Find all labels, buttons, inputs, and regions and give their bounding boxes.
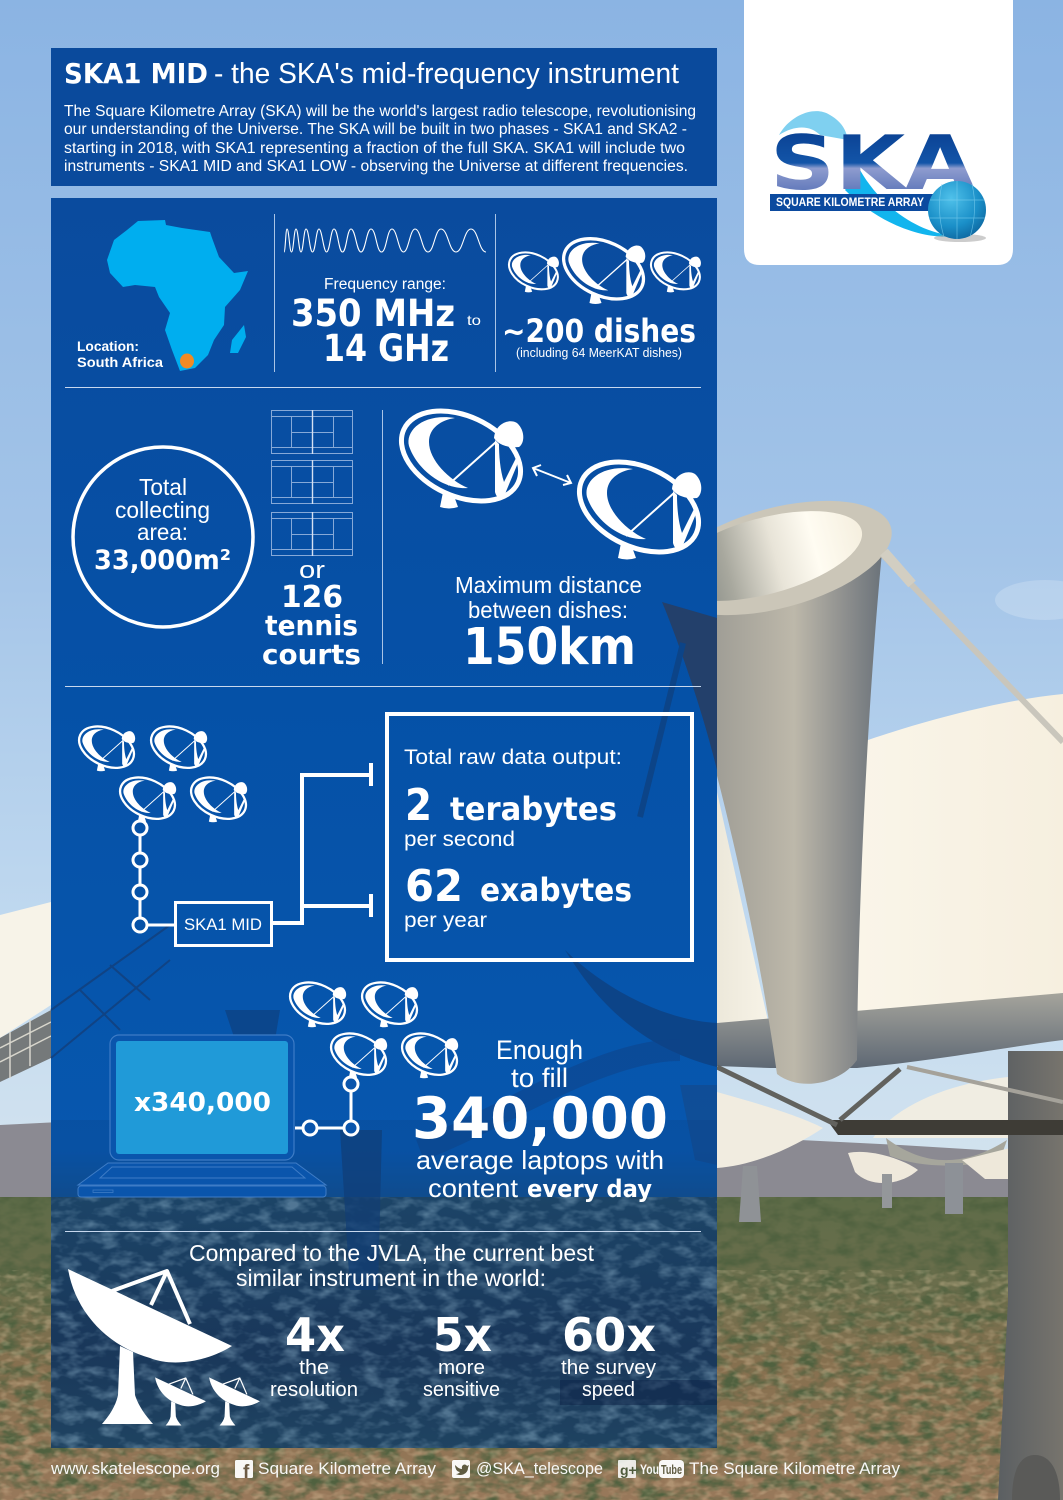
intro paragraph: instruments - SKA1 MID and SKA1 LOW - observing the Universe at different frequencies. (64, 158, 688, 175)
data output box: per year (404, 909, 487, 932)
tennis courts text: or (299, 557, 325, 584)
dish count: ~200 dishes (502, 312, 696, 350)
background photo: distant hills (0, 1122, 1063, 1200)
background photo: far dishes (717, 1077, 1010, 1222)
frequency range text (291, 276, 481, 370)
location label: Location: (77, 338, 139, 354)
maximum distance text: Maximum distance (455, 572, 642, 598)
data output box (387, 714, 692, 960)
footer links: The Square Kilometre Array (689, 1460, 901, 1478)
laptops text: content (428, 1173, 519, 1203)
collecting area circle: Total (139, 474, 187, 500)
icon: four dishes to laptop (283, 974, 464, 1083)
laptops text (412, 1035, 668, 1203)
stat: 5x sensitive (423, 1308, 500, 1401)
icon: laptop: x340,000 (134, 1088, 271, 1118)
logo globe (928, 181, 986, 242)
data output box: Total raw data output: (404, 746, 622, 769)
main panel (51, 198, 717, 1448)
arrow: distance between dishes (533, 465, 571, 485)
collecting area circle (73, 447, 253, 627)
frequency range text: Frequency range: (324, 276, 446, 293)
maximum distance text: 150km (463, 618, 636, 677)
intro paragraph (64, 103, 696, 175)
header panel (51, 48, 717, 186)
frequency range text: 14 GHz (323, 327, 449, 370)
logo swoosh lower (845, 170, 955, 237)
maximum distance text: between dishes: (468, 597, 628, 623)
SKA1 MID label: SKA1 MID (184, 915, 262, 934)
background photo: pedestal and struts (717, 1051, 1063, 1500)
icon: JVLA dishes (68, 1269, 260, 1425)
comparison heading: Compared to the JVLA, the current best (189, 1240, 595, 1266)
stat: 60x survey speed: the survey (561, 1357, 656, 1379)
background photo: feed horn (650, 479, 1063, 1084)
location: Africa map (107, 220, 248, 371)
stat: 60x survey speed (561, 1308, 656, 1401)
footer links: @SKA_telescope (476, 1460, 603, 1478)
tennis courts icons (271, 410, 353, 556)
stat: 5x sensitive: sensitive (423, 1379, 500, 1401)
footer links: Square Kilometre Array (258, 1460, 437, 1478)
laptops text: Enough (496, 1035, 583, 1065)
background photo: main dish (717, 694, 1063, 1068)
tennis courts text: courts (262, 638, 361, 671)
comparison heading (189, 1240, 595, 1291)
stat: 4x resolution: 4x (285, 1308, 345, 1362)
icon: facebook (235, 1460, 253, 1483)
logo card (744, 0, 1013, 265)
logo strapline (770, 194, 935, 211)
stat: 4x resolution: the (299, 1357, 329, 1379)
stat: 5x sensitive: 5x (433, 1308, 492, 1362)
icon: four dishes (72, 718, 253, 827)
comparison heading: similar instrument in the world: (236, 1265, 546, 1291)
icon: YouTube: Tube (661, 1462, 682, 1477)
footer links (50, 1460, 901, 1483)
collecting area circle: 33,000m² (94, 545, 231, 576)
laptops text: average laptops with (416, 1145, 664, 1175)
data output box: terabytes (450, 790, 617, 828)
ghost photo shapes through panel (51, 602, 717, 1290)
laptops text: to fill (511, 1063, 568, 1093)
icon: twitter (452, 1460, 470, 1478)
intro paragraph: The Square Kilometre Array (SKA) will be the world's largest radio telescope, revolutionising (64, 103, 696, 120)
icon: google plus: g+ (620, 1462, 637, 1478)
data output box: 2 (405, 780, 432, 831)
location label: South Africa (77, 354, 163, 370)
tennis courts text: tennis (265, 609, 358, 642)
icon: laptop (78, 1035, 326, 1197)
icon: frequency wave (284, 229, 486, 252)
icon: three dishes (503, 227, 706, 311)
background photo: left dish and truss (0, 902, 51, 1082)
data flow diagram (133, 763, 371, 946)
stat: 4x resolution (270, 1308, 358, 1401)
intro paragraph: starting in 2018, with SKA1 representing a fraction of the full SKA. SKA1 will include two (64, 140, 685, 157)
stat: 4x resolution: resolution (270, 1379, 358, 1401)
footer links: www.skatelescope.org (50, 1460, 220, 1478)
icon: YouTube (640, 1460, 684, 1478)
laptops text: 340,000 (412, 1086, 668, 1152)
background photo: ground (0, 1197, 1063, 1500)
laptop connector (295, 1077, 358, 1135)
collecting area circle: area: (137, 519, 188, 545)
tennis courts text (262, 557, 361, 671)
heading: - the SKA's mid-frequency instrument (214, 58, 679, 90)
icon: facebook: f (243, 1462, 250, 1483)
tennis courts text: 126 (281, 580, 343, 615)
heading: SKA1 MID (64, 57, 208, 90)
data output box: per second (404, 828, 515, 851)
location label (77, 338, 163, 370)
intro paragraph: our understanding of the Universe. The SKA will be built in two phases - SKA1 and SKA2 - (64, 121, 687, 138)
frequency range text: 350 MHz (291, 292, 455, 335)
stat: 5x sensitive: more (438, 1357, 485, 1379)
frequency range text: to (467, 312, 481, 328)
stat: 60x survey speed: 60x (562, 1308, 656, 1362)
data output box: 62 (405, 861, 463, 912)
laptops text: every day (527, 1175, 652, 1203)
logo wordmark: SKA (770, 119, 975, 207)
maximum distance text (455, 572, 642, 677)
background photo: cloud (995, 580, 1063, 620)
icon: two dishes (387, 393, 713, 570)
logo swooshes (779, 111, 848, 140)
icon: YouTube: You (640, 1461, 659, 1477)
logo strapline: SQUARE KILOMETRE ARRAY (776, 197, 924, 209)
collecting area circle: collecting (115, 497, 210, 523)
dish count: (including 64 MeerKAT dishes) (516, 346, 682, 360)
stat: 60x survey speed: speed (582, 1379, 635, 1401)
data output box: exabytes (480, 871, 632, 909)
